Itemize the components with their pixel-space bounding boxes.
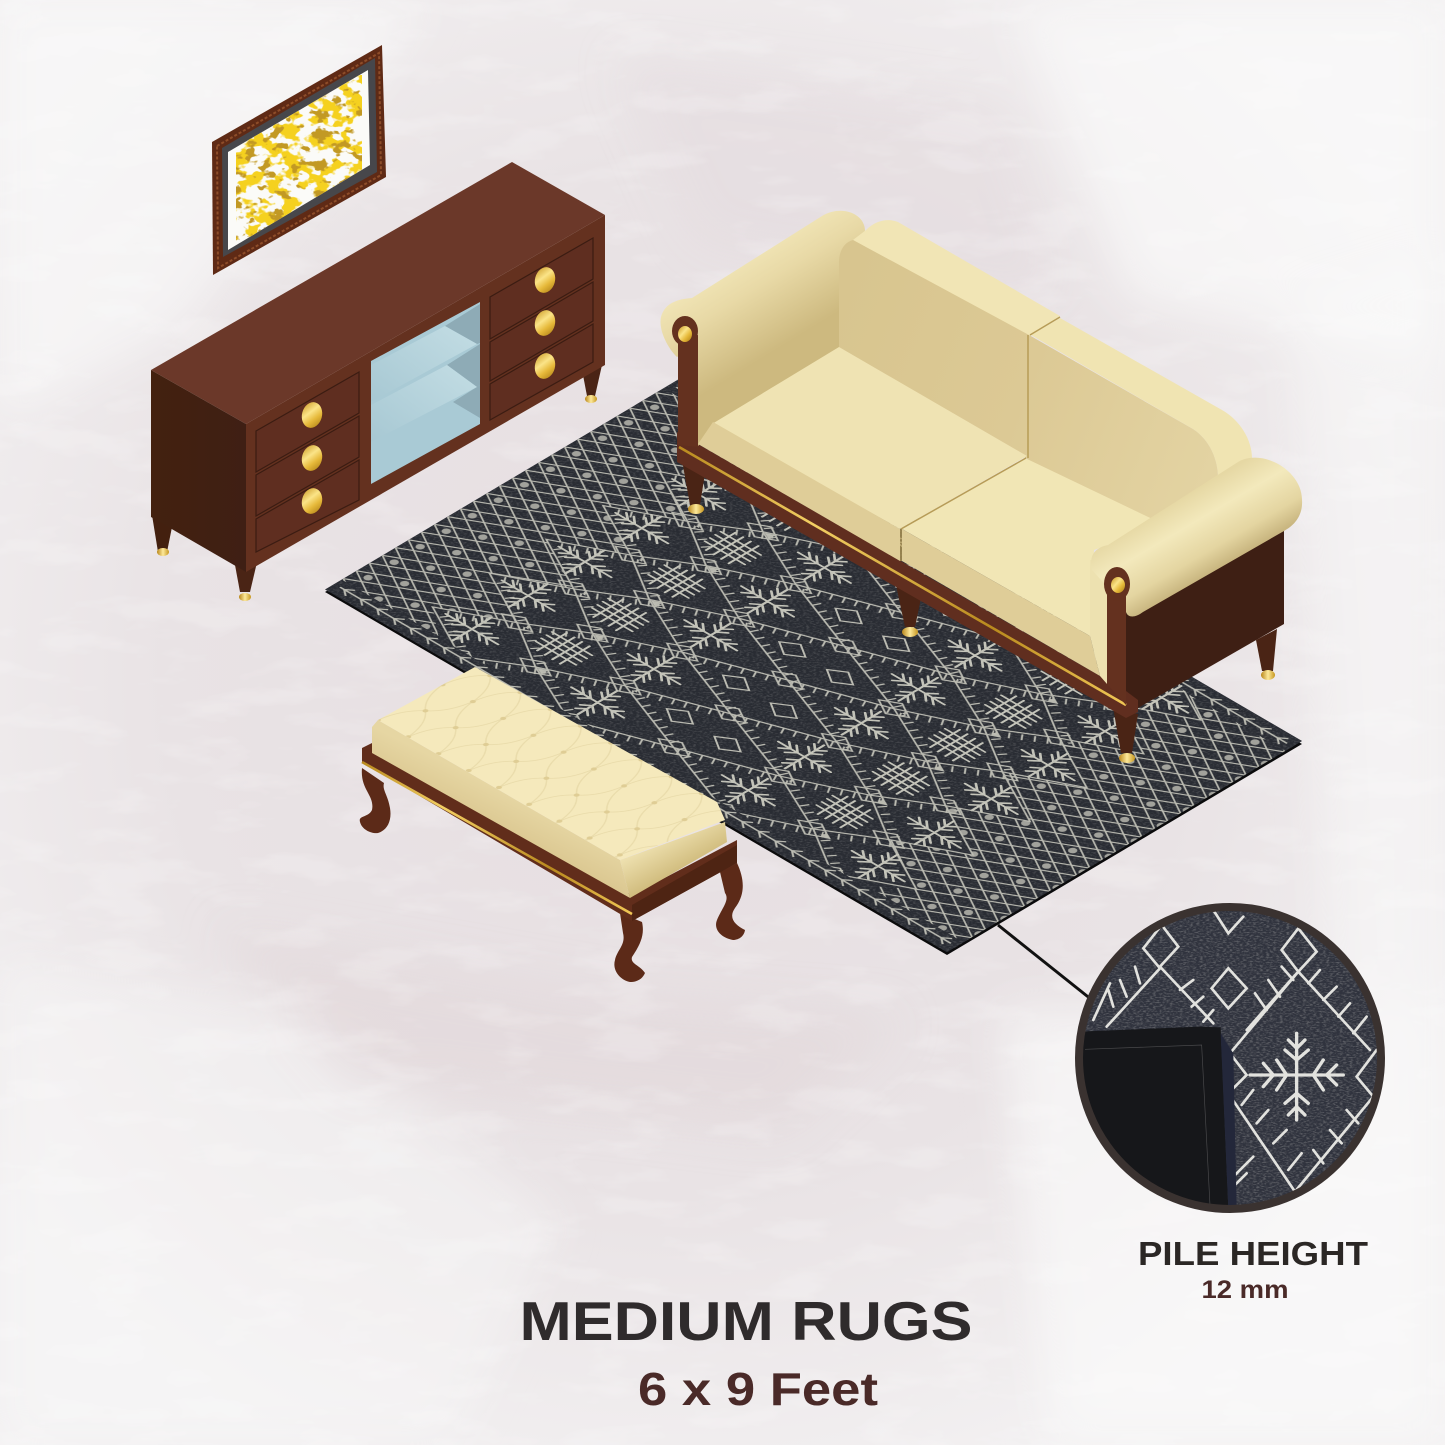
pile height label: PILE HEIGHT: [1138, 1235, 1368, 1272]
cabinet legs: [152, 365, 602, 601]
rug diamond field: [431, 462, 1202, 890]
bench: [360, 667, 745, 982]
bench frame: [362, 743, 737, 921]
sideboard cabinet: [151, 162, 605, 601]
glass shelves: [371, 302, 480, 484]
left back cushion: [839, 220, 1060, 460]
rug motifs: snowflakes, grids, small diamonds: [426, 434, 1208, 893]
folded black rug backing: [1080, 1027, 1237, 1208]
sofa legs: [682, 460, 1277, 763]
sofa right side panel: [1126, 525, 1284, 708]
left arm roll: [660, 211, 865, 446]
wall picture with gold abstract art: [212, 45, 386, 275]
callout leader line: [998, 925, 1092, 1000]
right arm post and scroll: [1104, 567, 1130, 705]
left arm inner patch: [698, 370, 790, 446]
title: MEDIUM RUGS: [520, 1290, 972, 1352]
right seat cushion: [902, 458, 1165, 684]
title: [520, 1290, 972, 1415]
left seat cushion: [698, 347, 1027, 561]
cabinet side: [151, 370, 246, 572]
sofa gold trim: [679, 447, 1126, 705]
bench cushion: [372, 667, 727, 898]
right arm roll: [1091, 458, 1302, 616]
sofa: [660, 211, 1302, 763]
cabinet top: [151, 162, 605, 424]
left arm post and scroll: [672, 316, 698, 447]
right drawers: [490, 238, 593, 420]
right back cushion: [1027, 318, 1252, 526]
title: 6 x 9 Feet: [638, 1363, 878, 1415]
rug: [325, 378, 1303, 955]
detail rug linework: [1093, 910, 1377, 1192]
sofa rail: [677, 432, 1138, 718]
pile height label: 12 mm: [1202, 1276, 1288, 1304]
brass drawer knobs: [299, 265, 558, 516]
circular detail of rug pile: [1075, 903, 1385, 1213]
cabinet front: [246, 215, 605, 572]
rug fishbone edges: [333, 383, 1294, 948]
cushion seams: [901, 317, 1060, 561]
left drawers: [256, 372, 359, 552]
bench legs: [360, 768, 745, 982]
rug end lattice borders: [337, 385, 1290, 945]
pile height label: [1138, 1235, 1368, 1304]
detail snowflake: [1250, 1033, 1343, 1120]
